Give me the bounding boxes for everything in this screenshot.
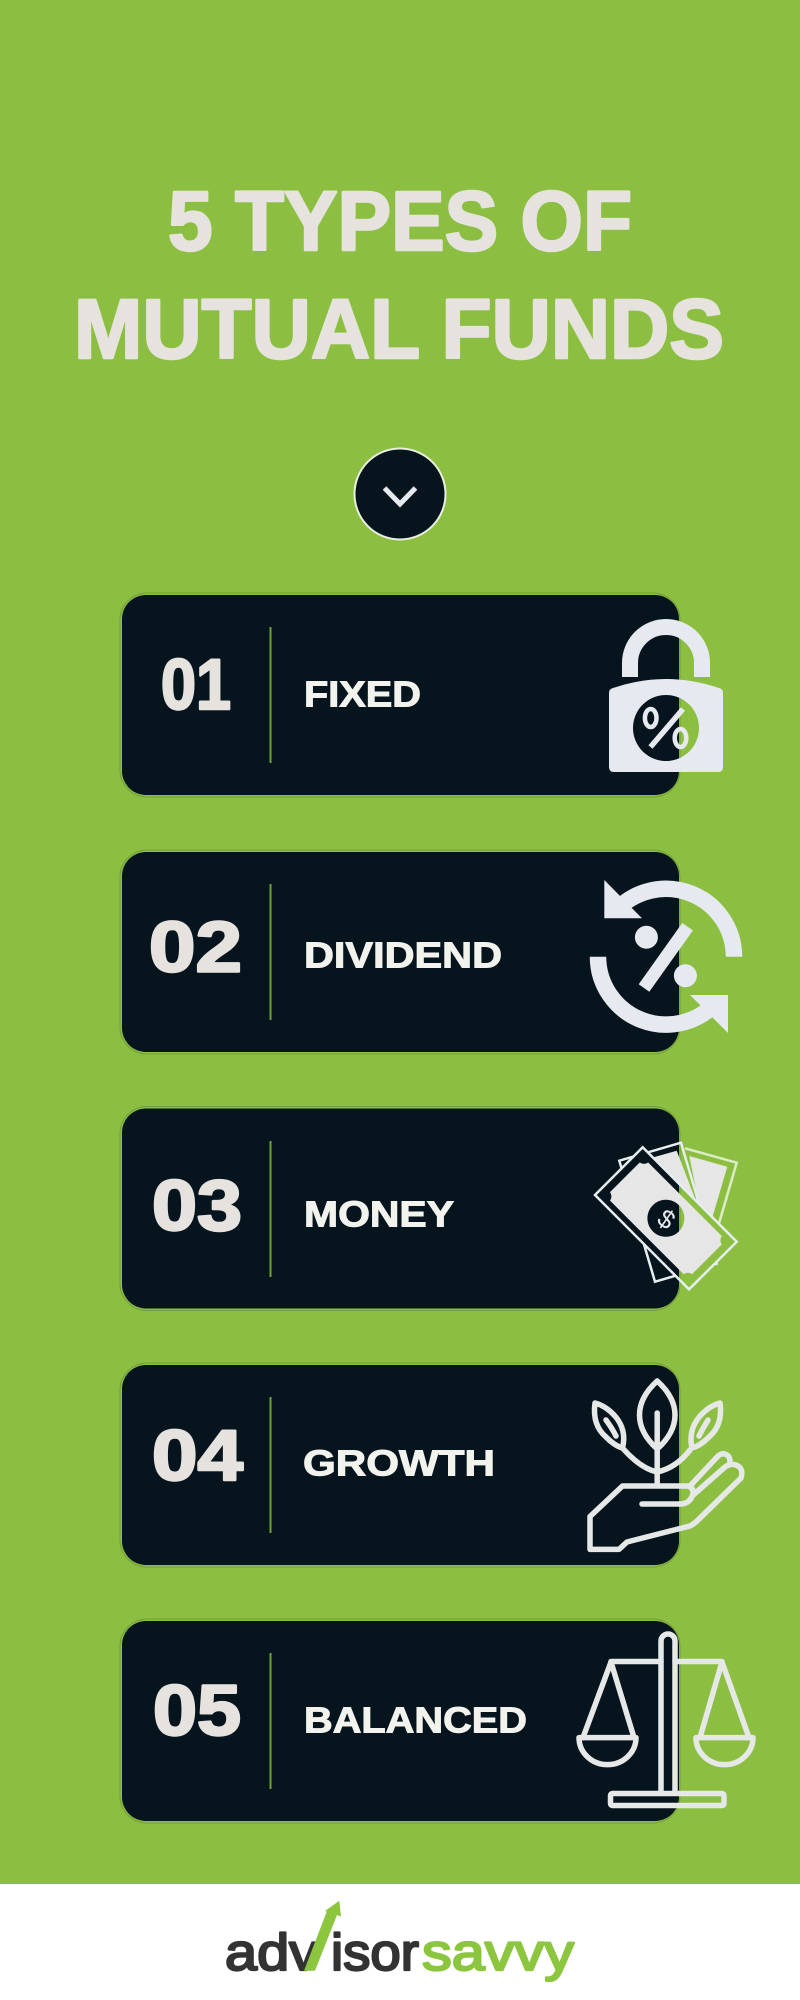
icon: percent with rotating arrows [598,880,734,1033]
icon: banknotes [595,1143,737,1289]
number 05: 05 [153,1672,241,1751]
logo: advisorsavvy [225,1901,574,1982]
label growth: GROWTH [303,1442,495,1484]
label dividend: DIVIDEND [304,934,502,976]
panel: 02 dividend [120,850,734,1054]
icon: chevron down circle [354,448,446,540]
panel: 01 fixed [120,593,723,797]
label balanced: BALANCED [304,1700,527,1740]
number 03: 03 [152,1167,242,1246]
title: 5 TYPES OF [168,174,632,268]
label fixed: FIXED [304,674,421,714]
number 02: 02 [149,908,242,988]
panel: 05 balanced [120,1619,753,1823]
panel: 04 growth [120,1363,742,1567]
icon: balance scale [579,1634,753,1806]
icon: plant in hand [590,1381,742,1549]
icon: banknotes: $ [652,1203,681,1236]
logo: advisorsavvy: adv [225,1924,318,1982]
logo: advisorsavvy: savvy [422,1924,574,1982]
icon: padlock with percent [609,627,723,772]
number 04: 04 [152,1417,244,1496]
title [74,174,724,376]
footer band [0,1884,800,2000]
logo: advisorsavvy: isor [331,1924,419,1982]
title: MUTUAL FUNDS [74,282,724,376]
label money: MONEY [304,1194,454,1234]
panel: 03 money [120,1106,737,1310]
number 01: 01 [161,646,231,725]
